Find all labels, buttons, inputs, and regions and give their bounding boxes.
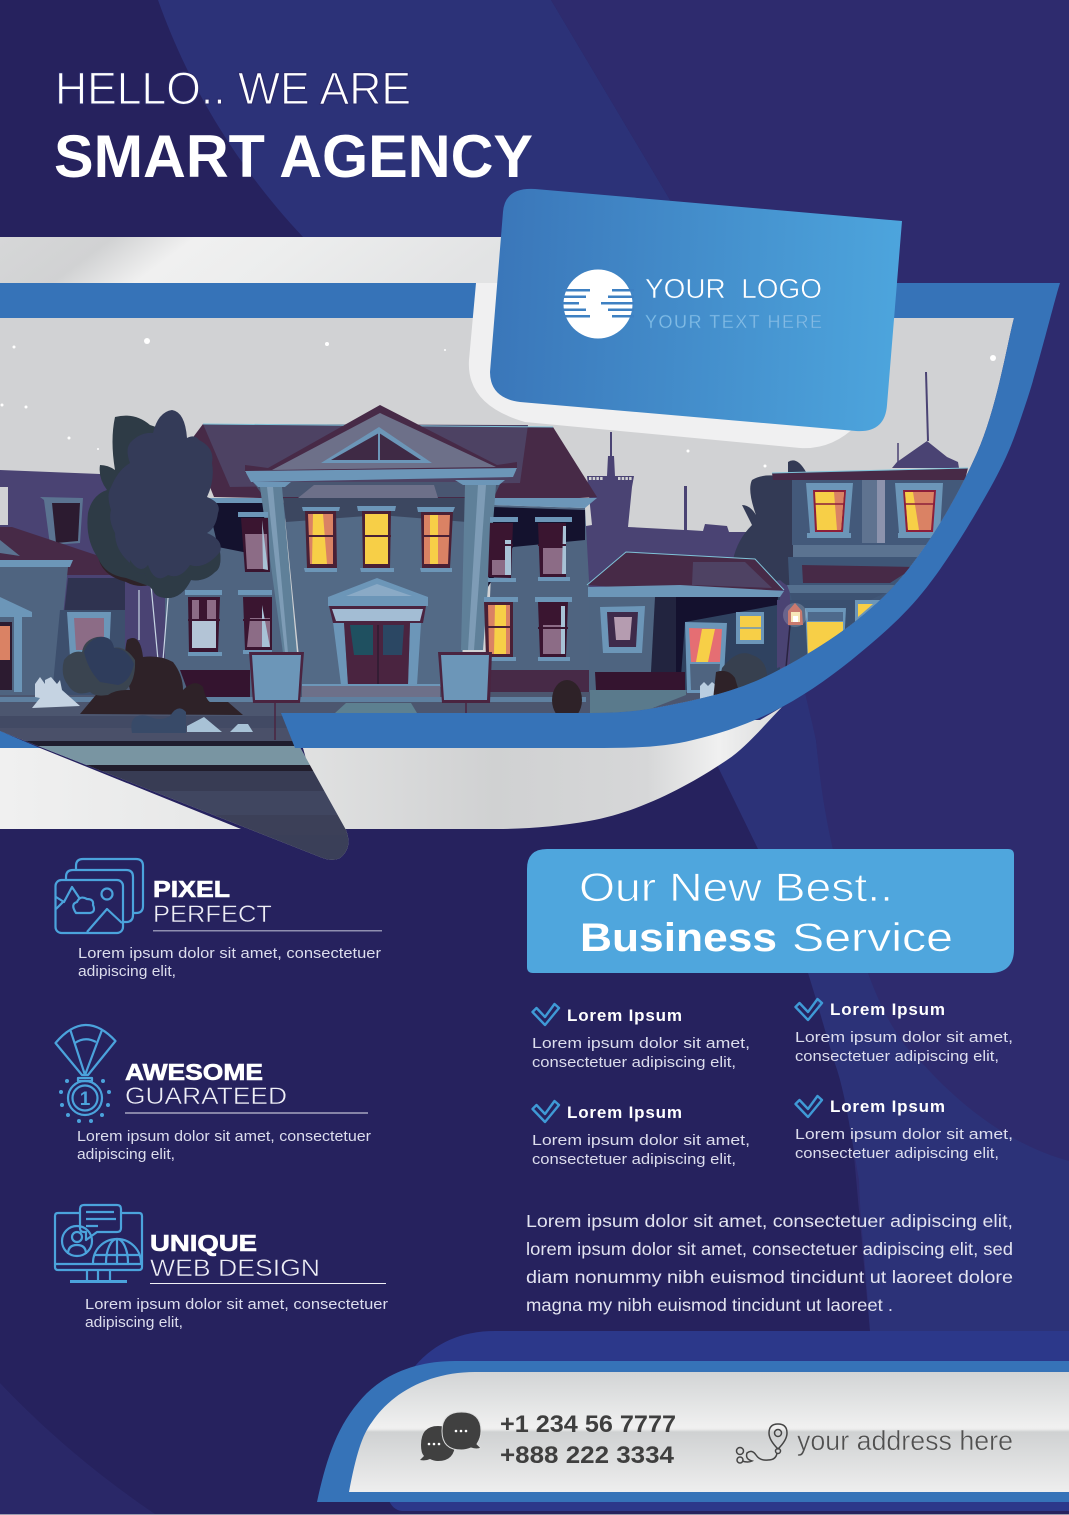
street — [0, 690, 686, 865]
upper windows — [806, 483, 943, 533]
item text: consectetuer adipiscing elit, — [795, 1145, 999, 1162]
heading line two: Service — [792, 916, 953, 960]
description: adipiscing elit, — [77, 1146, 175, 1163]
list item 1 — [532, 1004, 750, 1071]
right tall building — [772, 372, 968, 700]
description — [85, 1296, 388, 1331]
sky — [0, 318, 1069, 878]
item text: Lorem ipsum dolor sit amet, — [795, 1126, 1013, 1143]
description: Lorem ipsum dolor sit amet, consectetuer — [85, 1296, 388, 1313]
lower windows and door — [855, 600, 880, 622]
right wing — [490, 505, 590, 670]
item text: Lorem ipsum dolor sit amet, — [532, 1132, 750, 1149]
item text: Lorem ipsum dolor sit amet, — [532, 1035, 750, 1052]
phone numbers — [500, 1411, 676, 1469]
logo tagline: YOUR TEXT HERE — [645, 312, 822, 332]
pixel label: PIXEL — [153, 876, 230, 902]
silver band top — [0, 237, 510, 283]
big tree — [87, 410, 221, 660]
purple skyline — [0, 432, 800, 669]
paragraph: Lorem ipsum dolor sit amet, consectetuer adipiscing elit, — [526, 1211, 1013, 1231]
list item 2 — [532, 1101, 750, 1168]
address: your address here — [797, 1425, 1013, 1456]
footer frame — [317, 1361, 1069, 1502]
list item 3 — [795, 999, 1013, 1065]
heading line two — [580, 916, 953, 960]
main building — [165, 405, 597, 697]
feature: awesome guarateed — [56, 1025, 371, 1163]
item text — [532, 1035, 750, 1071]
heading: hello: HELLO.. WE ARE — [55, 63, 411, 114]
paragraph: diam nonummy nibh euismod tincidunt ut laoreet dolore — [526, 1267, 1013, 1287]
icon: medal — [56, 1025, 116, 1123]
paragraph — [526, 1211, 1013, 1315]
left window — [600, 606, 645, 653]
description: Lorem ipsum dolor sit amet, consectetuer — [78, 945, 381, 962]
illustration: town street at night — [0, 318, 1069, 878]
lantern — [777, 600, 780, 668]
perfect label: PERFECT — [153, 901, 272, 928]
pediment — [245, 405, 517, 473]
icon: medal: 1 — [80, 1089, 91, 1110]
description: adipiscing elit, — [85, 1314, 183, 1331]
item title: Lorem Ipsum — [567, 1006, 682, 1025]
logo card — [490, 189, 902, 431]
footer panel — [349, 1372, 1069, 1492]
icon: chat bubbles — [420, 1412, 481, 1461]
item text — [795, 1029, 1013, 1065]
blue ribbon curve — [281, 283, 1060, 748]
service heading panel — [527, 849, 1014, 973]
icon: images — [56, 859, 143, 933]
heading line one: Our New Best.. — [579, 866, 893, 910]
blue band left — [0, 283, 900, 318]
door and lit glass — [685, 622, 727, 693]
porch and door — [302, 578, 440, 697]
icon: check — [532, 1004, 559, 1025]
phone numbers: +1 234 56 7777 — [500, 1411, 676, 1438]
phone numbers: +888 222 3334 — [500, 1442, 675, 1469]
heading: smart agency: SMART AGENCY — [54, 123, 533, 190]
right window — [736, 612, 764, 644]
left house — [0, 497, 125, 695]
sign posts and signs — [249, 652, 492, 740]
silver lower sweep — [295, 707, 782, 829]
silver corner left — [0, 748, 241, 829]
item title: Lorem Ipsum — [830, 1097, 945, 1116]
item title: Lorem Ipsum — [567, 1103, 682, 1122]
logo card backing — [469, 283, 880, 448]
heading line two: Business — [580, 916, 777, 960]
item text: consectetuer adipiscing elit, — [795, 1048, 999, 1065]
small house — [587, 552, 784, 693]
logo text: YOUR LOGO — [645, 273, 822, 304]
title — [54, 63, 533, 190]
item text: consectetuer adipiscing elit, — [532, 1151, 736, 1168]
tree behind right building — [733, 460, 806, 590]
awesome label: AWESOME — [125, 1059, 263, 1085]
paragraph: magna my nibh euismod tincidunt ut laoreet . — [526, 1295, 893, 1315]
item text — [532, 1132, 750, 1168]
icon: check — [532, 1101, 559, 1122]
description — [77, 1128, 371, 1163]
footer backing — [388, 1331, 1069, 1511]
floor bands — [793, 545, 926, 557]
central windows — [302, 506, 455, 572]
feature: pixel perfect — [56, 859, 382, 980]
description: Lorem ipsum dolor sit amet, consectetuer — [77, 1128, 371, 1145]
item text: Lorem ipsum dolor sit amet, — [795, 1029, 1013, 1046]
tower balustrade — [589, 477, 632, 480]
fence — [32, 677, 80, 708]
icon: map pin route — [736, 1424, 787, 1463]
shrub beside small house — [700, 653, 767, 700]
roof — [191, 424, 597, 503]
logo mark — [562, 270, 634, 338]
stars — [0, 338, 996, 468]
ground under houses — [0, 682, 714, 714]
web design label: WEB DESIGN — [150, 1255, 320, 1282]
side windows — [185, 512, 572, 661]
columns — [260, 487, 297, 653]
feature: unique web design — [55, 1205, 388, 1331]
description: adipiscing elit, — [78, 963, 176, 980]
item text — [795, 1126, 1013, 1162]
blue sliver left — [0, 731, 40, 748]
icon: check — [796, 999, 822, 1020]
icon: check — [796, 1096, 822, 1117]
icon: monitor — [55, 1205, 142, 1287]
centre wall — [283, 498, 469, 687]
left wing — [165, 503, 285, 697]
item title: Lorem Ipsum — [830, 1000, 945, 1019]
list item 4 — [795, 1096, 1013, 1162]
guarateed label: GUARATEED — [125, 1083, 287, 1110]
bushes — [63, 637, 582, 733]
paragraph: lorem ipsum dolor sit amet, consectetuer adipiscing elit, sed — [526, 1239, 1013, 1259]
unique label: UNIQUE — [150, 1230, 257, 1256]
description — [78, 945, 381, 980]
item text: consectetuer adipiscing elit, — [532, 1054, 736, 1071]
